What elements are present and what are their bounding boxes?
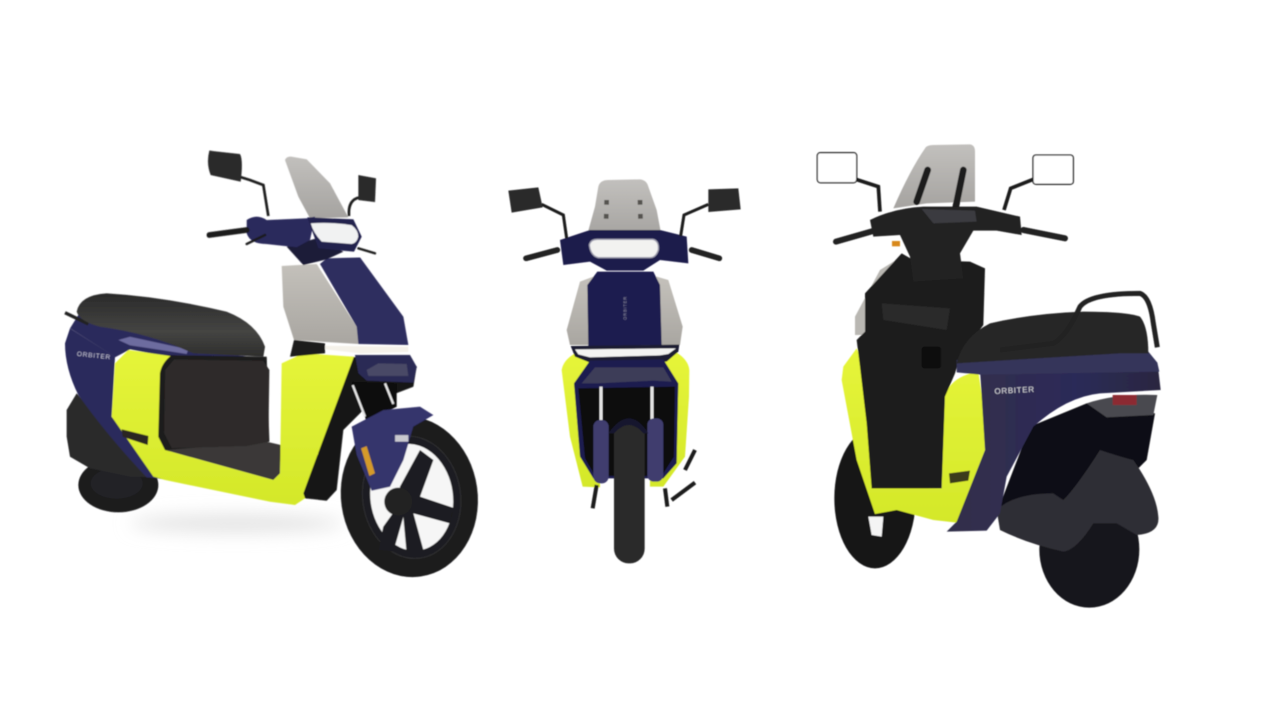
gray side panels (567, 277, 683, 345)
yellow body (112, 350, 354, 505)
dark band behind strip (571, 345, 679, 363)
fork stanchions (352, 382, 397, 422)
handlebar housing (560, 230, 688, 271)
yellow left panel (562, 353, 600, 487)
side vent (949, 471, 970, 483)
lock (922, 347, 941, 368)
right grip (692, 250, 719, 258)
lamp housing glass (367, 363, 408, 376)
scooter: front view (508, 179, 741, 563)
brand text on body: ORBITER (76, 351, 111, 362)
yellow body (842, 348, 985, 523)
headlight (311, 223, 358, 244)
rear wheel (1039, 491, 1139, 608)
seat (77, 293, 265, 357)
right mirror (1033, 155, 1073, 184)
tail light housing (1087, 395, 1157, 417)
front tyre (614, 420, 645, 563)
dark rear underbody (997, 403, 1155, 513)
seat trim (957, 352, 1159, 375)
storage box (164, 359, 269, 448)
gray front panel sliver (855, 261, 895, 335)
handlebar housing (247, 217, 315, 247)
rear drivetrain (67, 393, 150, 477)
scooter: three-quarter front view (65, 151, 488, 586)
lever left (247, 235, 375, 253)
fender badge (395, 435, 408, 442)
yellow right panel (650, 353, 689, 487)
rear rack (65, 313, 88, 324)
glovebox (882, 303, 950, 330)
fork stanchions (601, 387, 652, 420)
tail light (1113, 395, 1137, 405)
left mirror (817, 153, 857, 183)
windscreen (893, 144, 975, 208)
dark gap under panel (290, 340, 325, 357)
kick stand (593, 450, 695, 508)
windscreen (285, 157, 348, 218)
seat (957, 312, 1148, 363)
right mirror (708, 188, 741, 212)
seat trim highlight (118, 337, 188, 354)
right mirror (358, 175, 376, 202)
left mirror (208, 151, 242, 182)
fender arch (608, 418, 648, 433)
left mirror stem (220, 171, 268, 216)
front dark underbody (303, 357, 417, 501)
white light strip (325, 346, 408, 353)
ground shadow (130, 515, 343, 532)
black leg shield (857, 253, 985, 488)
white strip (575, 348, 676, 357)
handlebar and stem (870, 207, 1022, 282)
scooter: rear three-quarter view (817, 144, 1161, 608)
front fender and fork leg (352, 407, 433, 491)
screen mounts (917, 170, 963, 211)
amber reflector (361, 446, 375, 476)
side vent (122, 429, 148, 445)
mirror stems (542, 204, 708, 238)
center vertical label: ORBITER (623, 296, 628, 320)
navy center panel (587, 272, 662, 347)
storage box backing (157, 355, 269, 452)
front wheel (330, 407, 488, 586)
fork legs (593, 418, 663, 483)
lamp bar (582, 367, 672, 383)
rear motor and mudguard (997, 450, 1158, 552)
front navy lamp housing (355, 355, 417, 383)
screen bolts (606, 200, 641, 225)
left mirror (508, 187, 543, 213)
headlight surround (307, 217, 362, 252)
right mirror stem (349, 197, 360, 216)
left grip (836, 230, 877, 242)
front wheel (834, 428, 916, 568)
headlight (589, 239, 658, 258)
rear navy body (65, 328, 173, 480)
lower cavity (578, 387, 675, 476)
gray front panel (282, 264, 358, 344)
floor (165, 442, 281, 480)
steering neck (287, 238, 343, 265)
right grip (1023, 230, 1065, 238)
mirror stems (856, 179, 1033, 212)
amber indicator (892, 241, 900, 246)
left grip (526, 250, 557, 258)
rear wheel (78, 458, 158, 512)
navy front panel (320, 257, 408, 345)
grab rail (1000, 293, 1157, 350)
brand text: ORBITER (994, 385, 1035, 396)
navy rear body (947, 370, 1161, 532)
left grip (209, 230, 247, 235)
display (922, 209, 977, 223)
seat base trim (70, 315, 263, 358)
lower navy shroud (574, 359, 678, 478)
windscreen (587, 179, 662, 237)
